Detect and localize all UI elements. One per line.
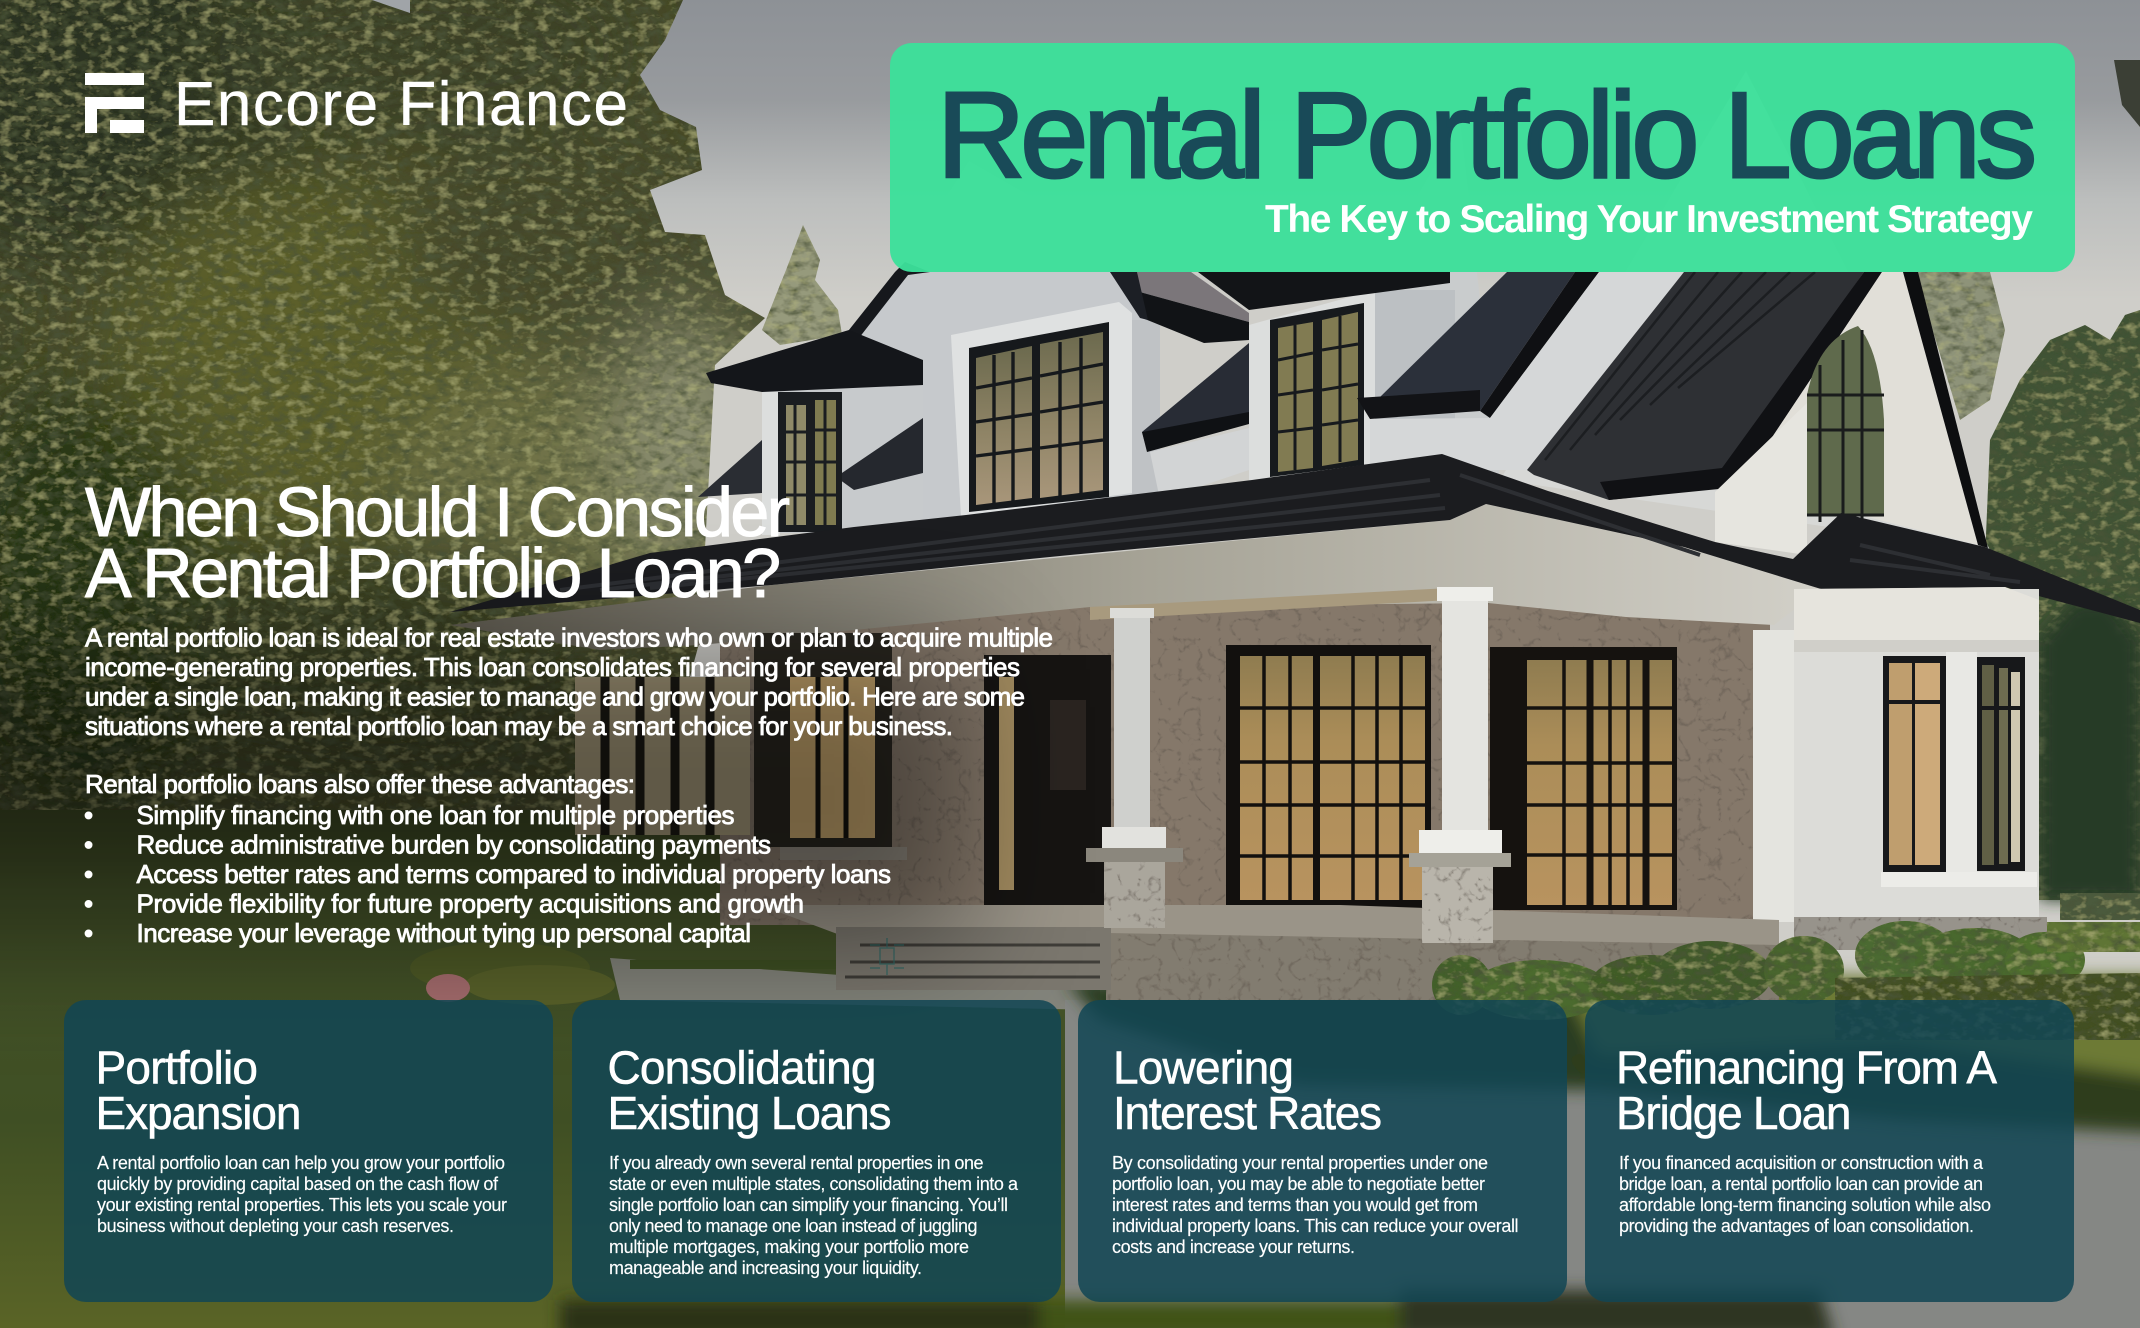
logo: Encore Finance: [85, 70, 628, 139]
bullet items: Access better rates and terms compared to individual property loans: [136, 859, 891, 889]
top-left sky fragment: [372, 0, 410, 13]
corner bay window: [1490, 647, 1677, 910]
bay window A: [1883, 656, 1946, 873]
house back gables (extend behind title panel): [841, 71, 1990, 550]
card text: manageable and increasing your liquidity.: [609, 1258, 922, 1278]
card text: quickly by providing capital based on the cash flow of: [97, 1174, 499, 1194]
intro paragraph: income-generating properties. This loan consolidates financing for several properties: [85, 652, 1020, 682]
card text: single portfolio loan can simplify your financing. You’ll: [609, 1195, 1008, 1215]
card heading: Refinancing From A: [1616, 1042, 1997, 1094]
bay window B: [1977, 657, 2025, 871]
card text: [1112, 1153, 1518, 1257]
upper-left dormer: [698, 330, 923, 535]
bullet items: •: [84, 859, 93, 889]
sky: [0, 0, 2140, 1000]
advantages list: [84, 769, 891, 948]
porch floor and steps: [760, 905, 2047, 1000]
bullet items: [84, 800, 891, 948]
logo wordmark: Encore Finance: [174, 70, 628, 139]
card text: individual property loans. This can reduce your overall: [1112, 1216, 1518, 1236]
card text: providing the advantages of loan consolidation.: [1619, 1216, 1974, 1236]
small watermark glyph on steps: [870, 938, 904, 975]
right gable with arch window: [1715, 272, 1988, 555]
left trees: [0, 0, 780, 860]
card heading: Lowering: [1113, 1042, 1294, 1094]
shingle and dark overhang between gables: [1110, 272, 1249, 500]
distant slim tree: [762, 225, 842, 345]
large slate roof: [1527, 272, 1882, 500]
large window left of second column: [1226, 645, 1431, 912]
panel background: [890, 43, 2075, 272]
card: lowering interest rates: [1078, 1000, 1567, 1302]
card text: business without depleting your cash reserves.: [97, 1216, 454, 1236]
left-side dark readability overlay: [0, 650, 970, 950]
card: refinancing from a bridge loan: [1585, 1000, 2074, 1302]
bullet items: Simplify financing with one loan for multiple properties: [136, 800, 734, 830]
title panel: [890, 43, 2075, 272]
card text: interest rates and terms than you would get from: [1112, 1195, 1478, 1215]
left windows and door: [575, 633, 1111, 907]
porch column right: [1409, 587, 1511, 943]
card text: affordable long-term financing solution while also: [1619, 1195, 1991, 1215]
card text: [1619, 1153, 1991, 1236]
porch column left: [1086, 608, 1183, 928]
bay wing wall: [1753, 587, 2039, 922]
central gable wall with window: [951, 302, 1160, 517]
card text: If you financed acquisition or construction with a: [1619, 1153, 1984, 1173]
bullet items: •: [84, 830, 93, 860]
intro paragraph: [85, 622, 1053, 741]
card heading: [1113, 1042, 1382, 1139]
hedge and flowers left: [410, 942, 840, 1005]
card text: A rental portfolio loan can help you grow your portfolio: [97, 1153, 505, 1173]
intro paragraph: A rental portfolio loan is ideal for real estate investors who own or plan to acquire multiple: [85, 622, 1053, 652]
card heading: [608, 1042, 892, 1139]
subtitle: The Key to Scaling Your Investment Strategy: [1265, 198, 2033, 241]
card heading: Existing Loans: [608, 1087, 892, 1139]
bullet items: Increase your leverage without tying up personal capital: [136, 918, 751, 948]
main roof: [450, 454, 2140, 623]
right trees: [1915, 60, 2140, 900]
central right dormer with window: [1198, 272, 1455, 485]
heading: when should I consider: When Should I Consider: [85, 473, 790, 551]
white wall strip: [1370, 272, 1684, 480]
card text: state or even multiple states, consolidating them into a: [609, 1174, 1019, 1194]
card text: By consolidating your rental properties under one: [1112, 1153, 1488, 1173]
intro paragraph: under a single loan, making it easier to manage and grow your portfolio. Here are some: [85, 682, 1025, 712]
garden path: [610, 958, 1100, 1010]
card text: costs and increase your returns.: [1112, 1237, 1355, 1257]
card heading: [96, 1042, 302, 1139]
lower storey stone wall: [720, 600, 1770, 925]
bullet items: •: [84, 889, 93, 919]
card text: [97, 1153, 507, 1236]
list intro: Rental portfolio loans also offer these advantages:: [85, 769, 635, 799]
card: portfolio expansion: [64, 1000, 553, 1302]
card heading: Portfolio: [96, 1042, 258, 1094]
card text: only need to manage one loan instead of juggling: [609, 1216, 978, 1236]
intro paragraph: situations where a rental portfolio loan may be a smart choice for your business.: [85, 711, 953, 741]
card heading: Bridge Loan: [1616, 1087, 1852, 1139]
fascia and soffit band: [450, 504, 1821, 650]
card heading: Expansion: [96, 1087, 302, 1139]
card text: bridge loan, a rental portfolio loan can provide an: [1619, 1174, 1983, 1194]
heading: when should I consider: A Rental Portfolio Loan?: [85, 534, 781, 612]
card heading: [1616, 1042, 1997, 1139]
logo mark: [85, 73, 144, 133]
bullet items: •: [84, 800, 93, 830]
card: consolidating existing loans: [572, 1000, 1061, 1302]
gable rake dark: [841, 262, 930, 347]
card text: your existing rental properties. This lets you scale your: [97, 1195, 507, 1215]
dormer window: [778, 392, 842, 532]
bullet items: Reduce administrative burden by consolidating payments: [136, 830, 771, 860]
card text: multiple mortgages, making your portfolio more: [609, 1237, 969, 1257]
sill: [1881, 872, 2037, 887]
heading: when should I consider: [85, 473, 790, 612]
bullet items: •: [84, 918, 93, 948]
lawn and garden ground: [0, 810, 1100, 1328]
title: Rental Portfolio Loans: [937, 67, 2037, 203]
card text: portfolio loan, you may be able to negotiate better: [1112, 1174, 1485, 1194]
right dormer slate roof: [1357, 272, 1599, 419]
right-side lawn, driveway and hedges: [560, 975, 2140, 1328]
card text: [609, 1153, 1019, 1278]
arch window: [1807, 326, 1884, 522]
card text: If you already own several rental properties in one: [609, 1153, 984, 1173]
card heading: Consolidating: [608, 1042, 876, 1094]
bushes: [1432, 893, 2140, 1040]
bullet items: Provide flexibility for future property acquisitions and growth: [136, 889, 804, 919]
card heading: Interest Rates: [1113, 1087, 1382, 1139]
